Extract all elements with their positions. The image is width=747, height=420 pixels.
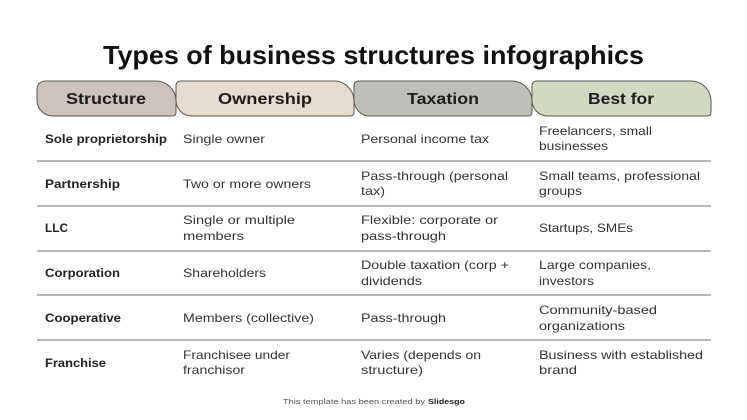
row: LLC: LLC [45,221,68,235]
row: Cooperative: organizations [539,319,625,333]
row: Sole proprietorship: Personal income tax [361,132,489,146]
footer credit: Slidesgo [428,399,465,406]
row: Sole proprietorship: Freelancers, small [539,124,652,138]
row: Corporation [45,258,651,288]
row: Franchise: Business with established [539,348,703,362]
header tab: Best for [532,81,711,116]
row: Corporation: Double taxation (corp + [361,258,509,272]
row: Franchise: Franchise [45,356,106,370]
row: Cooperative: Cooperative [45,311,121,325]
row: Cooperative: Community-based [539,303,657,317]
row: Corporation: dividends [361,274,422,288]
row: Franchise: structure) [361,363,423,377]
row: Cooperative [45,303,657,333]
row: Sole proprietorship: Sole proprietorship [45,132,167,146]
row: Partnership: Pass-through (personal [361,169,508,183]
row: Partnership: groups [539,184,582,198]
row: Partnership: Partnership [45,177,120,191]
row: Cooperative: Members (collective) [183,311,314,325]
row: Franchise: Franchisee under [183,348,290,362]
footer credit [283,399,465,406]
table header [37,81,711,116]
row: Sole proprietorship [45,124,652,153]
row: Franchise: Varies (depends on [361,348,481,362]
row: Corporation: investors [539,274,594,288]
header tab: Taxation [354,81,532,116]
title: Types of business structures infographics [103,40,644,70]
row: LLC: pass-through [361,229,446,243]
row: LLC: members [183,229,244,243]
row: Franchise [45,348,703,377]
header tab: Best for: Best for [588,91,654,108]
row: Partnership: tax) [361,184,385,198]
header tab: Ownership [176,81,354,116]
row: Corporation: Shareholders [183,266,266,280]
row: LLC: Single or multiple [183,213,295,227]
row: Sole proprietorship: Single owner [183,132,265,146]
header tab: Ownership: Ownership [218,91,312,108]
row: Sole proprietorship: businesses [539,139,608,153]
footer credit: This template has been created by [283,399,426,406]
header tab: Structure [37,81,176,116]
header tab: Structure: Structure [66,91,146,108]
header tab: Taxation: Taxation [407,91,479,108]
row: Cooperative: Pass-through [361,311,446,325]
row: Corporation: Large companies, [539,258,651,272]
row: LLC: Flexible: corporate or [361,213,498,227]
row: Franchise: brand [539,363,577,377]
row: Corporation: Corporation [45,266,120,280]
row: Franchise: franchisor [183,363,245,377]
row: LLC: Startups, SMEs [539,221,633,235]
row: Partnership: Two or more owners [183,177,311,191]
row: Partnership: Small teams, professional [539,169,700,183]
row: LLC [45,213,633,243]
row: Partnership [45,169,700,198]
